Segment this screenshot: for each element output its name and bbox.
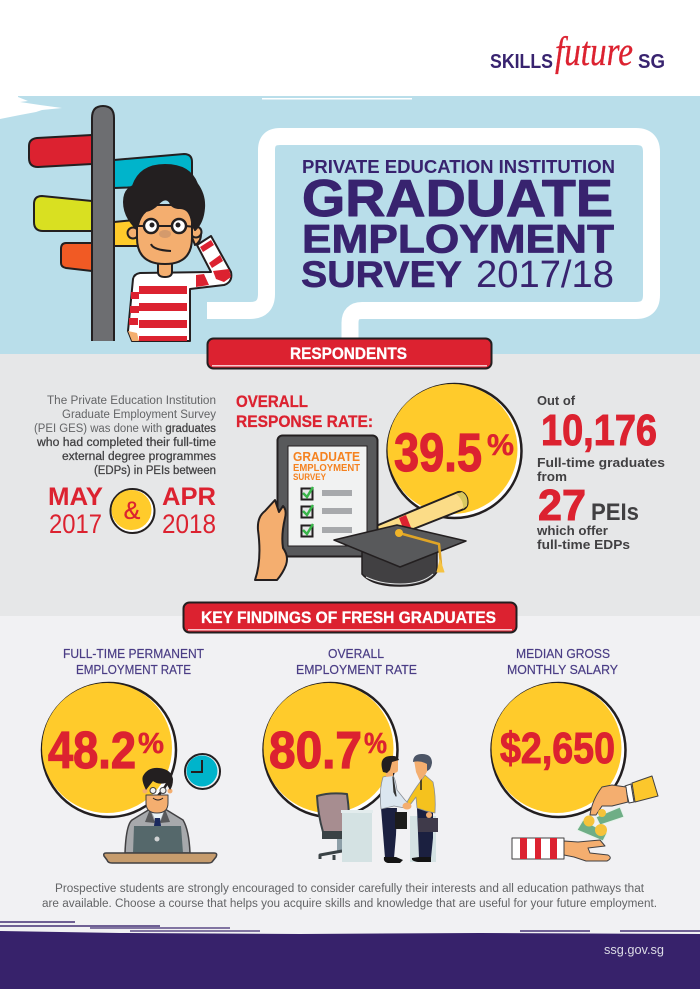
banner: respondents — [208, 338, 492, 368]
office chair — [317, 793, 349, 860]
panel: respondents background — [0, 354, 700, 616]
worker head — [146, 795, 168, 813]
dates: May 2017 and Apr 2018: APR — [162, 483, 216, 511]
column heading: overall employment rate — [296, 646, 417, 677]
sign: lime — [34, 196, 92, 231]
dates: May 2017 and Apr 2018: 2018 — [162, 509, 216, 539]
coins — [584, 809, 607, 836]
title: EMPLOYMENT — [302, 218, 614, 262]
column heading: overall employment rate: OVERALL — [328, 646, 384, 661]
text block: survey description: The Private Education Institution — [47, 395, 216, 407]
icon: graduation cap — [334, 525, 466, 586]
footer band — [0, 921, 700, 989]
title: GRADUATE — [302, 170, 613, 228]
stat: 10,176 graduates from 27 PEIs: from — [537, 469, 567, 484]
heading: overall response rate: RESPONSE RATE: — [236, 412, 373, 431]
banner: key findings: KEY FINDINGS OF FRESH GRADUATES — [201, 609, 496, 627]
text block: survey description: who had completed their full-time — [36, 437, 216, 449]
icon: hands exchanging money — [512, 776, 658, 861]
icon: clock — [185, 754, 220, 789]
desk left — [341, 810, 373, 862]
nose — [159, 230, 171, 238]
right briefcase — [418, 818, 438, 832]
sign: yellow — [114, 219, 145, 246]
sign: orange — [61, 243, 92, 271]
icon: handshake scene — [317, 754, 438, 863]
dates: May 2017 and Apr 2018 — [48, 483, 216, 539]
logo: SkillsFuture SG: SG — [638, 51, 665, 73]
dates: May 2017 and Apr 2018: MAY — [48, 483, 103, 511]
left briefcase — [395, 812, 407, 829]
logo: SkillsFuture SG — [490, 28, 665, 74]
stat: 48.2 percent circle: % — [138, 728, 164, 760]
illustration: boy with glasses — [124, 165, 231, 341]
tablet text: SURVEY — [293, 472, 326, 482]
tablet text — [293, 449, 360, 482]
sign: teal — [114, 154, 192, 188]
hair — [124, 165, 204, 230]
column heading: full-time permanent employment rate: FULL-TIME PERMANENT — [63, 646, 204, 661]
worker body — [125, 809, 190, 853]
desk — [104, 853, 217, 863]
stat: $2,650 circle: $2,650 — [500, 724, 615, 773]
column heading: median gross monthly salary — [507, 646, 618, 677]
ampersand badge: & — [124, 497, 141, 525]
tablet text: GRADUATE — [293, 449, 360, 464]
stat: 48.2 percent circle: 48.2 — [48, 722, 136, 780]
dates: May 2017 and Apr 2018: 2017 — [49, 509, 102, 539]
text block: survey description: (EDPs) in PEIs between — [94, 465, 216, 477]
bottom hand — [512, 838, 610, 861]
website: ssg.gov.sg — [604, 942, 664, 957]
tablet text: EMPLOYMENT — [293, 463, 360, 474]
closing note: are available. Choose a course that helps you acquire skills and knowledge that are useful for your future employment. — [42, 898, 657, 910]
text block: survey description: (PEI GES) was done with graduates — [34, 423, 216, 435]
stat: 48.2 percent circle — [42, 683, 176, 817]
icon: tablet survey — [278, 436, 378, 556]
face — [137, 205, 192, 264]
icon: diploma — [376, 492, 468, 543]
top hand — [590, 776, 658, 815]
stat: 80.7 percent circle: 80.7 — [269, 722, 362, 780]
ampersand badge — [110, 489, 154, 533]
text block: survey description — [34, 395, 216, 477]
hands clasped — [402, 802, 412, 810]
closing note: Prospective students are strongly encouraged to consider carefully their interests and all education pathways that — [55, 883, 645, 895]
sign: red — [29, 135, 92, 167]
ear right — [190, 226, 202, 238]
column heading: median gross monthly salary: MEDIAN GROSS — [516, 646, 610, 661]
stat: 39.5 percent circle: 39.5 — [394, 423, 482, 483]
stat: 10,176 graduates from 27 PEIs: full-time EDPs — [537, 537, 630, 552]
stat: 10,176 graduates from 27 PEIs: Full-time graduates — [537, 455, 665, 470]
text block: survey description: external degree programmes — [62, 451, 216, 463]
checklist — [302, 487, 352, 536]
hand — [190, 229, 201, 245]
icon: hand holding tablet — [255, 500, 287, 580]
stat: 10,176 graduates from 27 PEIs: 27 — [538, 481, 586, 530]
heading: overall response rate — [236, 392, 373, 431]
heading: overall response rate: OVERALL — [236, 392, 308, 411]
stat: 80.7 percent circle: % — [364, 728, 387, 760]
column heading: full-time permanent employment rate — [63, 646, 204, 677]
ear left — [128, 228, 138, 238]
stat: 10,176 graduates from 27 PEIs: 10,176 — [541, 406, 657, 455]
title: 2017/18 — [476, 254, 614, 296]
laptop — [133, 826, 183, 853]
stat: 10,176 graduates from 27 PEIs: which offer — [536, 523, 608, 538]
man right — [407, 754, 438, 862]
stat: $2,650 circle — [492, 683, 626, 817]
closing note — [42, 883, 657, 910]
banner: respondents: RESPONDENTS — [290, 345, 407, 363]
title frame: white road — [207, 136, 652, 345]
banknotes — [577, 807, 624, 841]
mouth — [151, 244, 171, 251]
column heading: median gross monthly salary: MONTHLY SALARY — [507, 662, 618, 677]
column heading: full-time permanent employment rate: EMPLOYMENT RATE — [76, 662, 191, 677]
torso and arm — [128, 236, 231, 341]
banner: key findings — [184, 602, 516, 632]
column heading: overall employment rate: EMPLOYMENT RATE — [296, 662, 417, 677]
title: PRIVATE EDUCATION INSTITUTION — [302, 157, 615, 177]
logo: SkillsFuture SG: SKILLS — [490, 51, 553, 73]
stat: 10,176 graduates from 27 PEIs: PEIs — [591, 499, 639, 526]
icon: office worker at laptop — [104, 768, 217, 863]
panel: key findings background — [0, 616, 700, 934]
stat: 10,176 graduates from 27 PEIs: Out of — [537, 393, 576, 408]
desk right — [410, 816, 436, 862]
panel: header background — [0, 93, 700, 354]
logo: SkillsFuture SG: future — [555, 28, 633, 74]
stat: 80.7 percent circle — [264, 683, 398, 817]
title — [301, 157, 615, 296]
illustration: signpost — [29, 106, 192, 341]
text block: survey description: Graduate Employment Survey — [62, 409, 216, 421]
neck — [158, 258, 172, 277]
stat: 39.5 percent circle — [388, 384, 522, 518]
man left — [380, 756, 408, 863]
stat: 10,176 graduates from 27 PEIs — [536, 393, 665, 552]
stat: 39.5 percent circle: % — [487, 429, 514, 462]
title: SURVEY — [301, 254, 462, 295]
glasses — [135, 219, 195, 233]
pole — [92, 106, 114, 341]
